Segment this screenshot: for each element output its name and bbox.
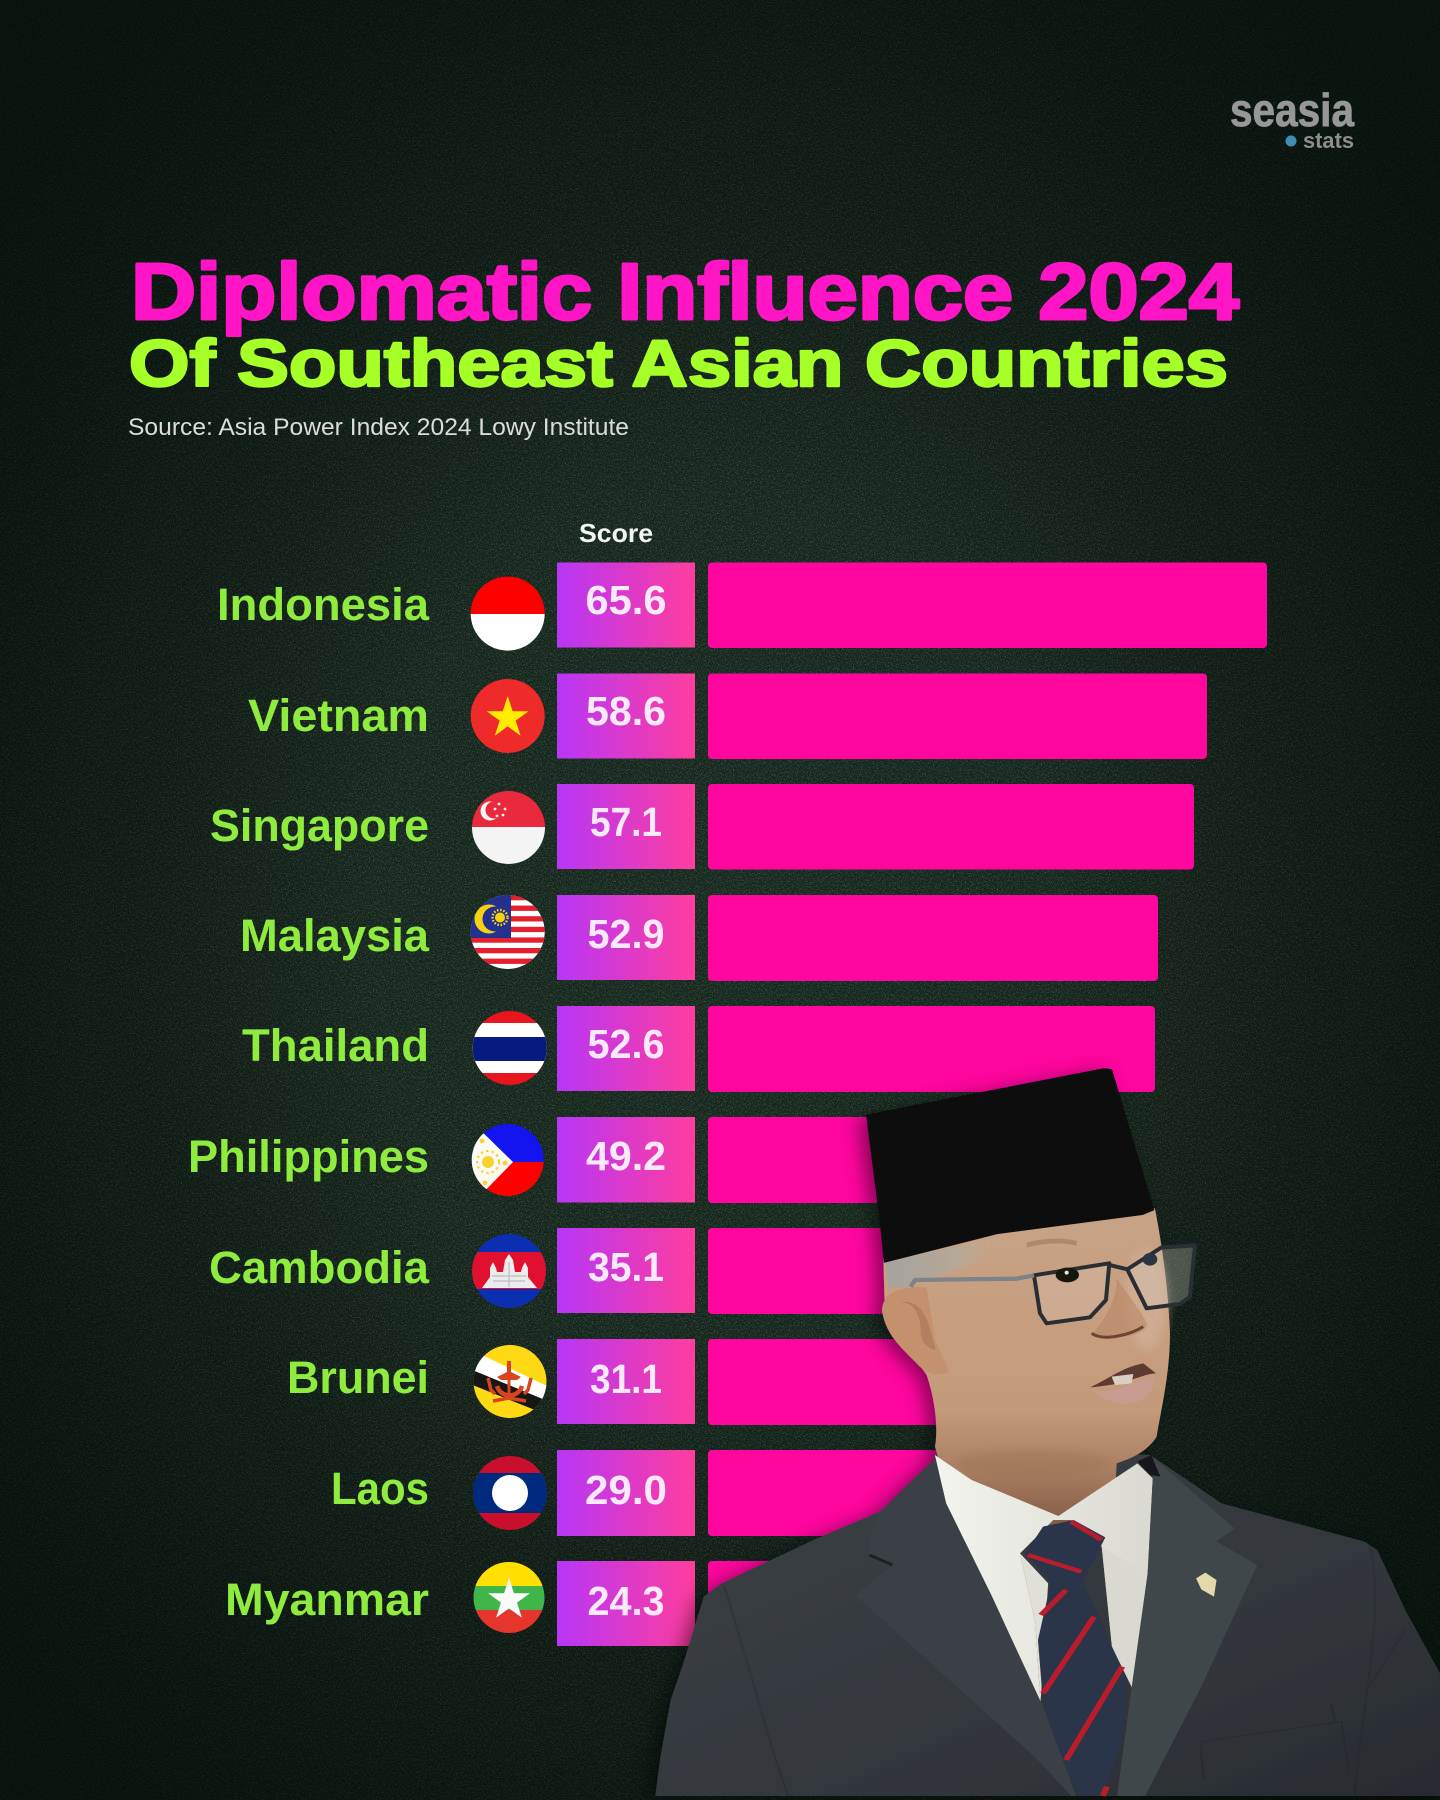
country label: Cambodia: Cambodia: [209, 1242, 430, 1293]
score box: Malaysia 52.9: 52.9: [588, 911, 664, 957]
bar: Thailand: [708, 1006, 1155, 1092]
column header: Score: Score: [579, 518, 653, 548]
score box: Vietnam 58.6: [557, 674, 695, 758]
flag: Philippines: [472, 1124, 544, 1196]
score box: Indonesia 65.6: [557, 562, 695, 648]
flag: Cambodia: [470, 1234, 548, 1308]
score box: Laos 29.0: 29.0: [585, 1467, 667, 1513]
country label: Malaysia: Malaysia: [240, 910, 430, 961]
logo: seasia stats: stats: [1303, 128, 1354, 153]
score box: Philippines 49.2: [557, 1117, 695, 1202]
flag: Thailand: [470, 1010, 550, 1086]
score box: Vietnam 58.6: 58.6: [586, 688, 666, 734]
score box: Myanmar 24.3: 24.3: [588, 1578, 664, 1624]
flag: Singapore: [470, 790, 548, 865]
score box: Singapore 57.1: 57.1: [590, 799, 662, 845]
flag: Myanmar: [474, 1562, 544, 1633]
bar: Malaysia: [708, 895, 1158, 981]
country label: Myanmar: Myanmar: [225, 1574, 429, 1625]
lapel pin: [1196, 1573, 1217, 1597]
score box: Laos 29.0: [557, 1450, 695, 1536]
bar: Vietnam: [708, 674, 1207, 759]
bar: Laos: [708, 1450, 955, 1536]
logo: seasia stats: seasia: [1230, 84, 1354, 136]
score box: Indonesia 65.6: 65.6: [586, 577, 666, 623]
eyes: [1056, 1253, 1157, 1282]
chart: diplomatic influence score bars: [188, 518, 1268, 1650]
glasses: [911, 1245, 1195, 1323]
bar: Cambodia: [708, 1228, 1007, 1314]
country label: Laos: Laos: [331, 1463, 429, 1514]
score box: Malaysia 52.9: [557, 895, 695, 980]
source line: Source: Asia Power Index 2024 Lowy Institute: [128, 414, 629, 441]
flag: Indonesia: [470, 576, 546, 652]
flag: Brunei: [474, 1345, 546, 1418]
mouth: [1090, 1363, 1156, 1404]
jacket body: [655, 1447, 1440, 1796]
score box: Myanmar 24.3: [557, 1561, 695, 1646]
bar: Brunei: [708, 1339, 973, 1425]
tie: [1025, 1520, 1127, 1796]
bar: Myanmar: [708, 1561, 915, 1647]
country label: Singapore: Singapore: [210, 800, 429, 851]
peci hat: [866, 1068, 1154, 1263]
score box: Cambodia 35.1: 35.1: [588, 1244, 664, 1290]
score box: Brunei 31.1: [557, 1339, 695, 1424]
country label: Vietnam: Vietnam: [248, 690, 429, 741]
flag: Malaysia: [470, 895, 546, 969]
subtitle: second heading line: Of Southeast Asian Countries: [129, 326, 1228, 400]
bar: Singapore: [708, 784, 1194, 870]
score box: Thailand 52.6: [557, 1006, 695, 1091]
bar: Philippines: [708, 1117, 1127, 1203]
score box: Philippines 49.2: 49.2: [586, 1133, 666, 1179]
country label: Indonesia: Indonesia: [217, 579, 430, 630]
score box: Brunei 31.1: 31.1: [590, 1356, 662, 1402]
title: main heading: Diplomatic Influence 2024: [131, 247, 1240, 336]
score box: Thailand 52.6: 52.6: [588, 1021, 664, 1067]
shirt and collar: [855, 1455, 1257, 1796]
flag: Laos: [470, 1455, 550, 1531]
score box: Cambodia 35.1: [557, 1228, 695, 1313]
logo: seasia stats: [1230, 84, 1354, 153]
portrait: man in black peci and dark suit: [655, 1068, 1440, 1796]
country label: Philippines: Philippines: [188, 1131, 429, 1182]
score box: Singapore 57.1: [557, 784, 695, 869]
country label: Brunei: Brunei: [287, 1352, 429, 1403]
flag: Vietnam: [470, 678, 546, 754]
bar: Indonesia: [708, 562, 1267, 648]
country label: Thailand: Thailand: [242, 1020, 429, 1071]
head and ear: [882, 1208, 1195, 1533]
jacket lapels: [855, 1458, 1076, 1796]
